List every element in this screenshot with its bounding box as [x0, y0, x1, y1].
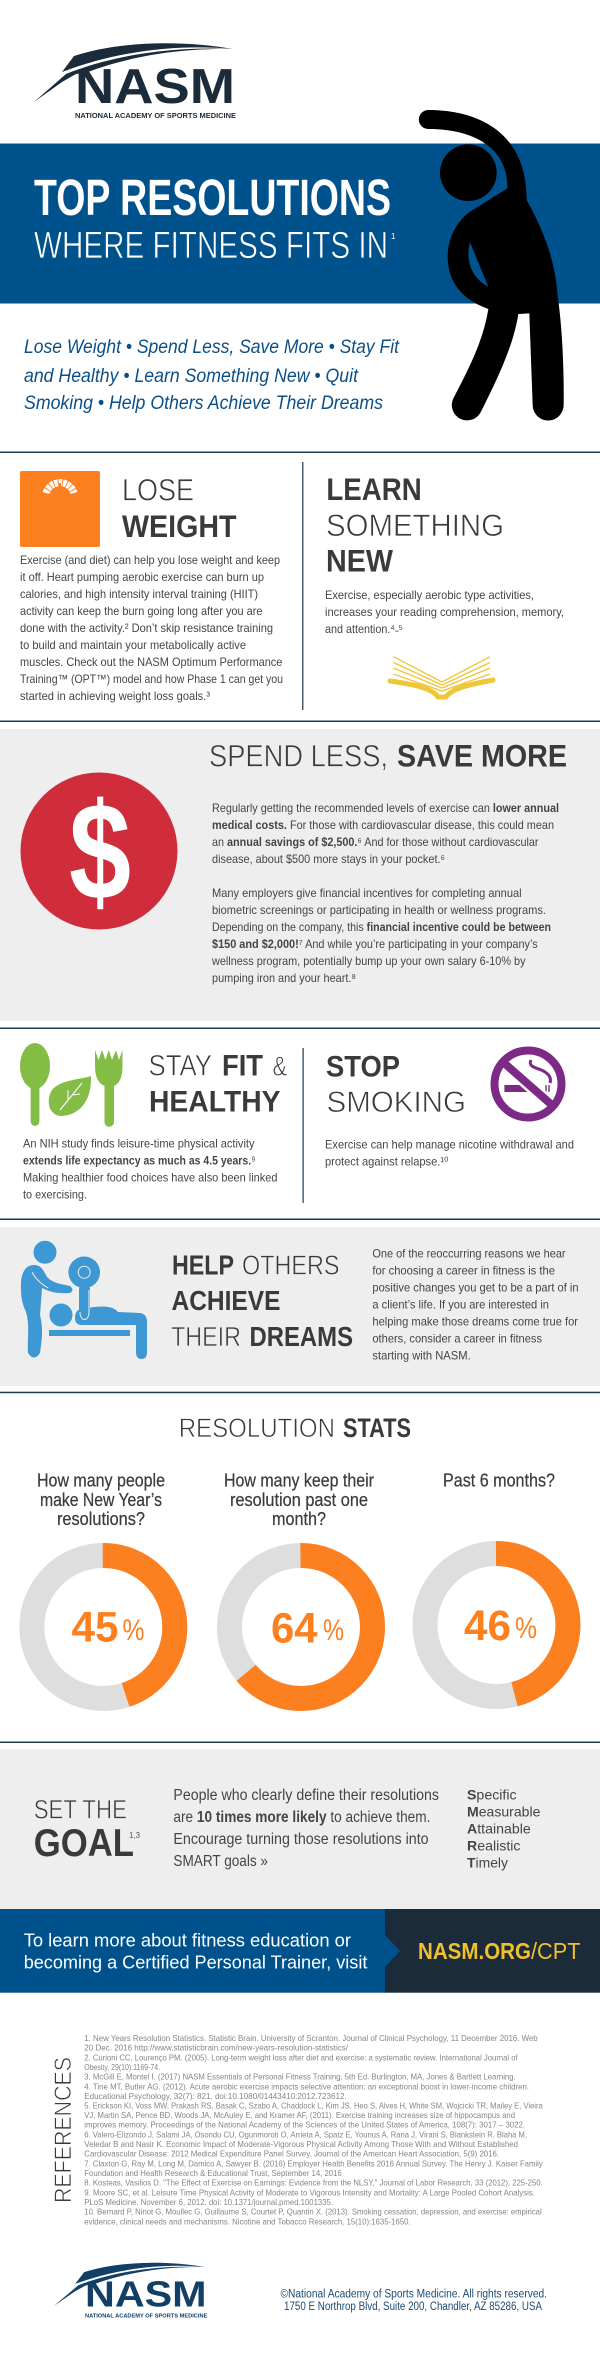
text: call to action: To learn more about fitness education or	[24, 1930, 351, 1951]
text: help others body: for choosing a career in fitness is the	[372, 1264, 555, 1278]
heading: help others achieve their dreams: ACHIEVE	[172, 1285, 280, 1316]
text: lose weight body: started in achieving weight loss goals.³	[20, 689, 210, 703]
text: reference list: 3. McGill E, Montel I. (2017) NASM Essentials of Personal Fitness Training, 5th Ed. Burlington, MA, Jones & Bartlett Learning.	[84, 2072, 516, 2082]
title: TOP RESOLUTIONS	[34, 169, 391, 226]
panel: spend less save more	[0, 729, 600, 1021]
text: lose weight body: to build and maintain your metabolically active	[20, 638, 246, 652]
text: reference list: 5. Erickson KI, Voss MW, Prakash RS, Basak C, Szabo A, Chaddock L, Kim JS, Heo S, Alves H, White SM, Wojcicki TR, Mailey E, Vieira	[84, 2101, 543, 2111]
donut chart: 64 percent: %	[323, 1614, 344, 1647]
text: SMART list: Attainable	[467, 1820, 531, 1836]
panel: resolution stats	[32, 1413, 568, 1698]
text: SMART list: Realistic	[467, 1837, 520, 1853]
text: stop smoking body: protect against relapse.¹⁰	[325, 1155, 449, 1169]
tagline: and Healthy • Learn Something New • Quit	[24, 366, 359, 387]
text: SMART list: Specific	[467, 1786, 517, 1802]
text: reference list: Cardiovascular Disease: 2012 Medical Expenditure Panel Survey. Journal of the American Heart Association, 5(9) 2016.	[84, 2149, 499, 2159]
icon: trainer spotting lifter	[21, 1241, 147, 1359]
stat question two: How many keep their	[224, 1471, 374, 1491]
text: reference list: Veledar B and Nasir K. Economic Impact of Moderate-Vigorous Physical Activity Among Those With and Without Established	[84, 2139, 518, 2149]
text: help others body: others, consider a career in fitness	[372, 1332, 542, 1346]
logo: NASM footer: NASM	[85, 2274, 207, 2315]
panel: stop smoking	[325, 1050, 574, 1169]
text: savings paragraph two: biometric screenings or participating in health or wellness programs.	[212, 903, 546, 917]
text: reference list: improves memory. Proceedings of the National Academy of the Sciences of the United States of America, 108(7): 3017 – 3022.	[84, 2120, 525, 2130]
panel: call to action	[0, 1909, 600, 1993]
text: stay fit body: to exercising.	[23, 1188, 87, 1202]
text: reference list: 4. Tine MT, Butler AG. (2012). Acute aerobic exercise impacts selective attention: an exceptional boost in lower-income children.	[84, 2081, 529, 2091]
heading: set the goal: 1,3	[129, 1831, 141, 1840]
text: savings paragraph one: medical costs. For those with cardiovascular disease, this could mean	[212, 818, 554, 832]
text: lose weight body: activity can keep the burn going long after you are	[20, 604, 263, 618]
stat question two: resolution past one	[230, 1490, 368, 1510]
stat question one	[37, 1471, 165, 1529]
text: SMART list: Timely	[467, 1854, 508, 1870]
text: savings paragraph one: disease, about $500 more stays in your pocket.⁶	[212, 852, 445, 866]
text: savings paragraph one	[212, 801, 559, 866]
tagline	[24, 337, 400, 414]
text: lose weight body	[20, 553, 283, 703]
text: goal explanation: People who clearly define their resolutions	[173, 1787, 439, 1804]
icon: spoon, leaf and fork	[20, 1043, 122, 1127]
text: reference list: 10. Bernard P, Ninot G, Moullec G, Guillaume S, Courtet P, Quantin X. (2013). Smoking cessation, depression, and exercise: empirical	[84, 2207, 542, 2217]
heading: help others achieve their dreams	[171, 1249, 353, 1352]
heading: learn something new: SOMETHING	[326, 507, 504, 543]
text: reference list: 7. Claxton G, Ray M, Long M, Damico A, Sawyer B. (2016) Employer Health Benefits 2016 Annual Survey. The Henry J. Kaiser Family	[84, 2158, 543, 2168]
donut chart: 64 percent: 64	[271, 1605, 318, 1653]
link: nasm.org/cpt: /CPT	[531, 1938, 580, 1964]
heading: spend less save more	[209, 738, 567, 774]
panel: help others	[0, 1227, 600, 1386]
heading: help others achieve their dreams: OTHERS	[242, 1249, 340, 1280]
text: help others body: helping make those dreams come true for	[372, 1315, 578, 1329]
heading: set the goal	[34, 1794, 141, 1865]
text: reference list: 9. Moore SC, et al. Leisure Time Physical Activity of Moderate to Vigorous Intensity and Mortality: A Large Pooled Cohort Analysis.	[84, 2187, 535, 2197]
heading: stop smoking	[326, 1051, 466, 1119]
heading: stop smoking: SMOKING	[326, 1086, 466, 1119]
subtitle: WHERE FITNESS FITS IN	[34, 225, 388, 267]
text: copyright	[280, 2289, 547, 2313]
heading: set the goal: GOAL	[34, 1822, 134, 1865]
heading: spend less save more: SAVE MORE	[397, 738, 567, 774]
text: help others body: starting with NASM.	[372, 1349, 471, 1363]
heading: stay fit and healthy: &	[272, 1051, 287, 1082]
heading: lose weight: WEIGHT	[122, 508, 236, 544]
text: savings paragraph two: Depending on the company, this financial incentive could be between	[212, 920, 551, 934]
text: goal explanation: SMART goals »	[173, 1853, 268, 1870]
text: learn body: Exercise, especially aerobic type activities,	[325, 588, 534, 602]
text: reference list: Obesity, 29(10):1169-74.	[84, 2062, 160, 2072]
text: stay fit body	[23, 1137, 278, 1202]
panel: stay fit and healthy	[20, 1043, 287, 1202]
logo: NASM header	[34, 43, 236, 120]
stat question two	[224, 1471, 374, 1529]
donut chart: 46 percent: %	[515, 1612, 537, 1645]
text: savings paragraph two: wellness program, potentially bump up your own salary 6-10% by	[211, 954, 526, 968]
icon: stretching figure	[419, 110, 564, 420]
text: goal explanation: Encourage turning those resolutions into	[173, 1831, 429, 1848]
text: lose weight body: done with the activity.² Don’t skip resistance training	[20, 621, 273, 635]
text: reference list: 1. New Years Resolution Statistics. Statistic Brain. University of Scranton. Journal of Clinical Psychology, 11 December 2016. Web	[84, 2033, 538, 2043]
arrow	[385, 1935, 400, 1967]
donut chart: 45 percent: 45	[72, 1604, 118, 1652]
icon: orange scale	[20, 471, 100, 547]
logo: NASM footer: NATIONAL ACADEMY OF SPORTS MEDICINE	[85, 2314, 208, 2320]
text: reference list: Foundation and Health Research & Educational Trust, September 14, 2016	[84, 2168, 342, 2178]
banner: title band	[0, 144, 600, 304]
text: savings paragraph two	[211, 886, 551, 985]
text: goal explanation	[173, 1787, 439, 1870]
tagline: Lose Weight • Spend Less, Save More • Stay Fit	[24, 337, 400, 358]
heading: references: REFERENCES	[50, 2057, 77, 2203]
icon: open book	[390, 657, 493, 697]
text: reference list: 8. Kosteas, Vasilios D. "The Effect of Exercise on Earnings: Evidence from the NLSY," Journal of Labor Research, 33 (2012), 225-250.	[84, 2178, 543, 2188]
text: savings paragraph two: pumping iron and your heart.⁸	[212, 971, 356, 985]
text: savings paragraph two: $150 and $2,000!⁷ And while you’re participating in your company’s	[212, 937, 538, 951]
text: lose weight body: muscles. Check out the NASM Optimum Performance	[20, 655, 283, 669]
stat question one: make New Year’s	[40, 1490, 162, 1510]
link: nasm.org/cpt: NASM.ORG	[418, 1938, 531, 1964]
panel: set the goal	[0, 1749, 600, 1909]
tagline: Smoking • Help Others Achieve Their Dreams	[24, 393, 383, 414]
stat question two: month?	[272, 1509, 326, 1529]
heading: stay fit and healthy: FIT	[222, 1050, 263, 1083]
subtitle: 1	[391, 232, 396, 241]
text: lose weight body: Exercise (and diet) can help you lose weight and keep	[20, 553, 280, 567]
donut chart: 46 percent: 46	[464, 1602, 511, 1650]
text: reference list: 2. Curioni CC, Lourenço PM. (2005). Long-term weight loss after diet and exercise: a systematic review. International Journal of	[84, 2052, 518, 2062]
text: lose weight body: calories, and high intensity interval training (HIIT)	[20, 587, 258, 601]
panel: learn something new	[325, 471, 564, 697]
donut chart: 45 percent	[32, 1556, 175, 1698]
heading: help others achieve their dreams: DREAMS	[250, 1321, 353, 1352]
text: reference list: 20 Dec. 2016 http://www.statisticbrain.com/new-years-resolution-statistics/	[84, 2043, 349, 2053]
text: SMART list	[467, 1786, 541, 1870]
text: help others body: One of the reoccurring reasons we hear	[372, 1247, 566, 1261]
text: help others body: positive changes you get to be a part of in	[372, 1281, 579, 1295]
text: lose weight body: it off. Heart pumping aerobic exercise can burn up	[20, 570, 264, 584]
donut chart: 45 percent: %	[122, 1614, 144, 1647]
text: stay fit body: extends life expectancy as much as 4.5 years.⁹	[23, 1154, 256, 1168]
text: learn body: increases your reading comprehension, memory,	[325, 605, 564, 619]
icon: no smoking	[494, 1050, 562, 1118]
heading: lose weight: LOSE	[122, 472, 194, 508]
text: learn body	[325, 588, 564, 636]
stat question one: resolutions?	[57, 1509, 145, 1529]
heading: spend less save more: SPEND LESS,	[209, 738, 388, 774]
heading: learn something new: NEW	[326, 543, 393, 579]
panel: lose weight	[20, 471, 283, 703]
text: reference list	[84, 2033, 543, 2226]
text: lose weight body: Training™ (OPT™) model and how Phase 1 can get you	[20, 672, 283, 686]
text: savings paragraph one: an annual savings of $2,500.⁶ And for those without cardiovascular	[212, 835, 539, 849]
heading: learn something new	[326, 471, 504, 579]
icon: dollar coin	[20, 772, 178, 930]
text: help others body: a client’s life. If you are interested in	[372, 1298, 549, 1312]
text: copyright: 1750 E Northrop Blvd, Suite 200, Chandler, AZ 85286, USA	[284, 2301, 542, 2313]
text: stop smoking body: Exercise can help manage nicotine withdrawal and	[325, 1138, 574, 1152]
text: help others body	[372, 1247, 579, 1363]
heading: stay fit and healthy: HEALTHY	[149, 1086, 280, 1119]
logo: NASM header: NASM	[75, 60, 235, 114]
text: stay fit body: Making healthier food choices have also been linked	[23, 1171, 278, 1185]
heading: learn something new: LEARN	[326, 471, 422, 507]
text: stop smoking body	[325, 1138, 574, 1169]
text: reference list: evidence, clinical needs and mechanisms. Nicotine and Tobacco Research, 15(10):1635-1650.	[84, 2216, 411, 2226]
text: stay fit body: An NIH study finds leisure-time physical activity	[23, 1137, 254, 1151]
heading: stay fit and healthy: STAY	[148, 1050, 212, 1083]
heading: help others achieve their dreams: THEIR	[171, 1321, 241, 1352]
text: savings paragraph two: Many employers give financial incentives for completing annual	[212, 886, 522, 900]
logo: NASM footer	[54, 2263, 208, 2320]
heading: set the goal: SET THE	[34, 1794, 127, 1824]
text: goal explanation: are 10 times more likely to achieve them.	[173, 1809, 430, 1826]
text: call to action	[24, 1930, 367, 1973]
stat question three: Past 6 months?	[443, 1471, 555, 1491]
text: reference list: 6. Valero-Elizondo J, Salami JA, Osondu CU, Ogunmoroti O, Arrieta A, Spatz E, Younus A, Rana J, Virani S, Blankstein R, Blaha M,	[84, 2129, 527, 2139]
text: reference list: VJ, Martin SA, Pence BD, Woods JA, McAuley E, and Kramer AF, (2011). Exercise training increases size of hippocampus and	[84, 2110, 515, 2120]
donut chart: 46 percent	[425, 1554, 568, 1696]
text: call to action: becoming a Certified Personal Trainer, visit	[24, 1952, 367, 1973]
heading: stop smoking: STOP	[326, 1051, 400, 1084]
donut chart: 64 percent	[230, 1556, 372, 1698]
heading: help others achieve their dreams: HELP	[172, 1249, 234, 1280]
logo: NASM header: NATIONAL ACADEMY OF SPORTS MEDICINE	[75, 111, 236, 120]
heading: resolution stats: RESOLUTION	[179, 1413, 335, 1443]
stat question one: How many people	[37, 1471, 165, 1491]
heading: lose weight	[122, 472, 236, 544]
text: SMART list: Measurable	[467, 1803, 541, 1819]
text: learn body: and attention.⁴˗⁵	[325, 622, 403, 636]
heading: resolution stats: STATS	[343, 1413, 411, 1443]
icon: dollar coin: $	[69, 775, 131, 929]
text: reference list: PLoS Medicine. November 6, 2012. doi: 10.1371/journal.pmed.1001335.	[84, 2197, 333, 2207]
text: copyright: ©National Academy of Sports Medicine. All rights reserved.	[280, 2289, 547, 2301]
heading: stay fit and healthy	[148, 1050, 287, 1119]
text: reference list: Educational Psychology, 32(7): 821. doi:10.1080/01443410.2012.723612.	[84, 2091, 347, 2101]
text: savings paragraph one: Regularly getting the recommended levels of exercise can lower annual	[212, 801, 559, 815]
